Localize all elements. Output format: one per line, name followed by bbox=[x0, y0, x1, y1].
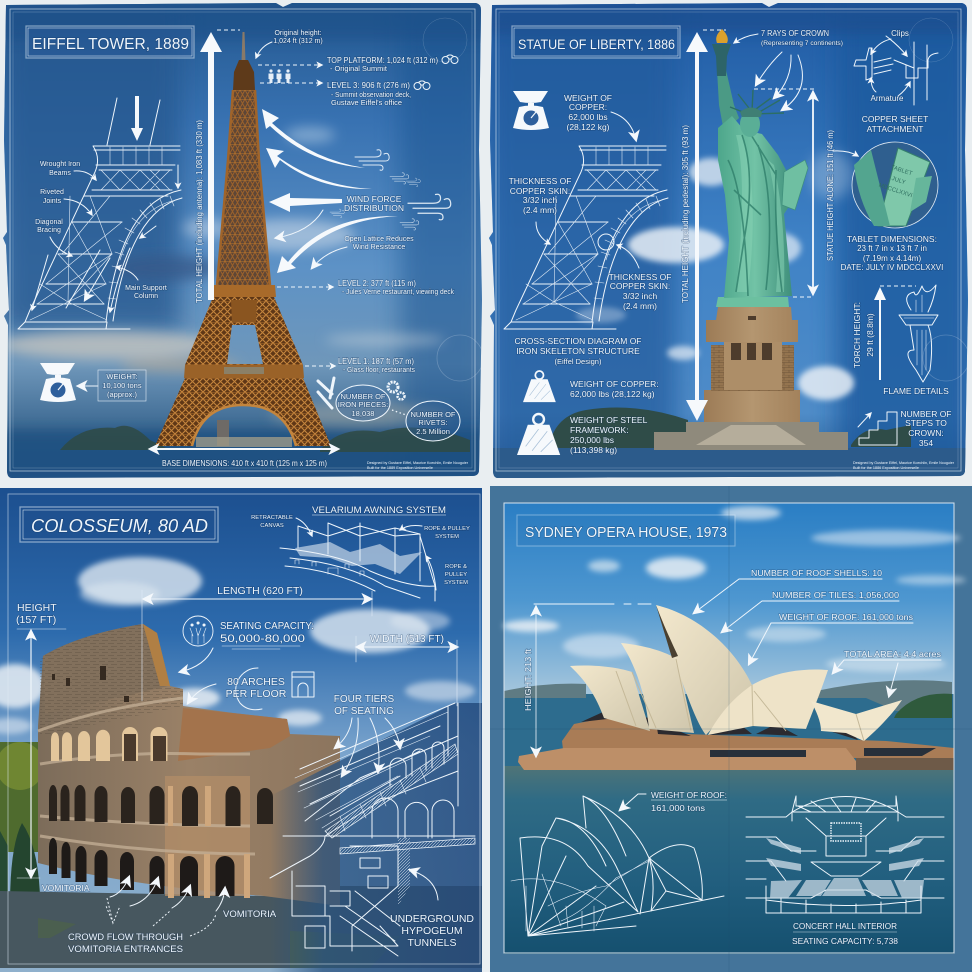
four tiers label: OF SEATING bbox=[334, 706, 394, 717]
right quay bbox=[856, 758, 954, 770]
thickness note left: (2.4 mm) bbox=[523, 205, 557, 215]
hypogeum label: UNDERGROUND bbox=[390, 913, 474, 925]
sky background bbox=[486, 0, 972, 486]
crown rays bbox=[730, 90, 784, 114]
hypogeum label: TUNNELS bbox=[407, 937, 457, 949]
plinth bbox=[716, 297, 789, 307]
clouds bbox=[503, 506, 966, 672]
glass band bbox=[710, 748, 936, 757]
label: riveted joints: Joints bbox=[43, 198, 62, 205]
inner frame and stamps bbox=[496, 9, 969, 471]
lattice note bbox=[344, 236, 414, 251]
weight box: 10,100 tons bbox=[102, 381, 142, 390]
panel: Colosseum bbox=[0, 488, 482, 972]
statue height label: STATUE HEIGHT ALONE: 151 ft (46 m) bbox=[825, 130, 835, 261]
trees bbox=[549, 408, 911, 450]
four tiers label: FOUR TIERS bbox=[334, 694, 395, 705]
iron structure diagram bbox=[18, 96, 182, 329]
panel: Eiffel Tower bbox=[0, 0, 490, 486]
height dimension: (157 FT) bbox=[16, 614, 56, 626]
level 2 callout bbox=[277, 279, 454, 296]
seating capacity: 50,000-80,000 bbox=[220, 633, 305, 645]
top platform callout: TOP PLATFORM: 1,024 ft (312 m) bbox=[327, 56, 438, 65]
pedestal centre bbox=[724, 340, 782, 390]
rivets oval: NUMBER OF bbox=[410, 410, 456, 419]
rivets oval: RIVETS: bbox=[418, 418, 448, 427]
retractable canvas note bbox=[251, 515, 312, 536]
harbour water bbox=[504, 694, 954, 769]
vomitoria right label: VOMITORIA bbox=[223, 909, 277, 920]
bolts and gears icons bbox=[318, 378, 404, 408]
roof weight callout: WEIGHT OF ROOF: 161,000 tons bbox=[779, 612, 913, 622]
label: wrought iron beams: Wrought Iron bbox=[40, 161, 80, 168]
statue height arrow bbox=[754, 89, 814, 297]
credit: Designed by Gustave Eiffel, Maurice Koechlin, Emile Nouguier bbox=[367, 461, 469, 465]
blueprint vignette bbox=[0, 0, 490, 480]
roof geometry sketch bbox=[511, 796, 724, 936]
original height note: Original height: bbox=[274, 30, 322, 37]
crown band bbox=[740, 108, 762, 117]
label: wrought iron beams bbox=[40, 161, 96, 180]
label: diagonal bracing bbox=[35, 219, 72, 256]
credit: Built for the 1889 Exposition Universelle bbox=[367, 466, 433, 470]
bottom tier arches bbox=[49, 838, 234, 896]
credit bbox=[367, 461, 469, 470]
length dimension: LENGTH (620 FT) bbox=[217, 585, 303, 597]
star fort bbox=[696, 425, 806, 445]
icon: steel weight bbox=[517, 414, 560, 455]
outer wall bbox=[38, 624, 340, 906]
copper attachment sketch bbox=[854, 36, 938, 105]
colosseum photo bbox=[38, 624, 340, 906]
thickness note right: COPPER SKIN: bbox=[610, 281, 670, 291]
tablet detail circle: TABLET bbox=[890, 165, 913, 177]
steel weight: 250,000 lbs bbox=[570, 435, 614, 445]
cross brace bbox=[231, 300, 257, 322]
rope note one bbox=[400, 526, 470, 540]
tablet bbox=[782, 160, 808, 210]
tablet dimensions: 23 ft 7 in x 13 ft 7 in bbox=[857, 244, 927, 253]
tablet detail circle: JULY bbox=[891, 176, 906, 186]
icon: scale bbox=[40, 363, 76, 402]
level 1 callout: - Glass floor, restaurants bbox=[343, 367, 415, 374]
top platform callout: - Original Summit bbox=[330, 66, 387, 73]
wind arrows bbox=[262, 109, 398, 273]
rope note two bbox=[426, 556, 468, 590]
level 1 callout: LEVEL 1: 187 ft (57 m) bbox=[338, 357, 414, 366]
velarium heading: VELARIUM AWNING SYSTEM bbox=[312, 505, 446, 516]
dotted connector bbox=[392, 410, 406, 415]
cornices bbox=[38, 698, 255, 854]
credit bbox=[853, 461, 955, 470]
height dimension: HEIGHT bbox=[17, 602, 57, 614]
title box: EIFFEL TOWER, 1889 bbox=[32, 36, 189, 53]
rope note two: ROPE & bbox=[445, 564, 467, 570]
original height note bbox=[256, 30, 323, 58]
label: main support column bbox=[116, 267, 167, 300]
label: main support column: Main Support bbox=[125, 285, 167, 292]
retractable canvas note: CANVAS bbox=[260, 523, 284, 529]
armature label: Armature bbox=[871, 94, 904, 103]
vomitoria left label: VOMITORIA bbox=[42, 883, 90, 893]
iron pieces oval: NUMBER OF bbox=[340, 392, 386, 401]
copper weight: 62,000 lbs (28,122 kg) bbox=[570, 389, 655, 399]
tablet arrow bbox=[833, 151, 858, 156]
flame bbox=[716, 29, 728, 43]
cross-section caption bbox=[514, 336, 642, 366]
shadow slope bbox=[143, 624, 170, 686]
cross-section caption: (Eiffel Design) bbox=[555, 357, 602, 366]
wind force label: DISTRIBUTION bbox=[344, 203, 404, 213]
crowd flow label: CROWD FLOW THROUGH bbox=[68, 932, 183, 943]
rope note two: PULLEY bbox=[445, 572, 467, 578]
label: main support column: Column bbox=[134, 293, 158, 300]
total height arrow bbox=[686, 30, 726, 421]
tunnel wall hatching bbox=[398, 838, 410, 906]
shell 1 dark edge bbox=[656, 605, 678, 658]
headland bbox=[894, 694, 952, 718]
roof weight callout bbox=[749, 612, 913, 664]
wind force label: WIND FORCE bbox=[347, 194, 402, 204]
tablet detail circle: MDCCLXXVI bbox=[878, 183, 913, 199]
glass wedges under shells bbox=[581, 712, 858, 740]
steps to crown: 354 bbox=[919, 438, 933, 448]
rope note two: SYSTEM bbox=[444, 580, 468, 586]
upper shaft bbox=[217, 90, 270, 285]
middle legs bbox=[185, 297, 303, 365]
deck windows bbox=[224, 367, 264, 374]
level 1 callout bbox=[305, 357, 415, 374]
sky bbox=[504, 503, 954, 698]
rope note one: SYSTEM bbox=[435, 534, 459, 540]
level 3 callout bbox=[260, 81, 430, 107]
rivets oval: 2.5 Million bbox=[416, 427, 450, 436]
crown rays callout: (Representing 7 continents) bbox=[761, 40, 843, 47]
thickness note right bbox=[609, 245, 671, 311]
thickness note left bbox=[509, 176, 571, 244]
torch height arrow bbox=[874, 286, 916, 380]
top tier arches bbox=[51, 727, 168, 761]
thickness note right: THICKNESS OF bbox=[609, 272, 671, 282]
base dimension arrow bbox=[150, 448, 338, 450]
windows bbox=[731, 316, 772, 360]
weight box: WEIGHT: bbox=[106, 372, 138, 381]
shaft edges bbox=[217, 90, 270, 285]
robe bbox=[718, 116, 792, 298]
steel weight: FRAMEWORK: bbox=[570, 425, 629, 435]
base steps bbox=[654, 422, 848, 450]
steel weight: WEIGHT OF STEEL bbox=[570, 415, 648, 425]
podium wall bbox=[562, 718, 954, 758]
lit piers bbox=[168, 786, 250, 898]
height dimension bbox=[16, 602, 66, 878]
thickness note left: 3/32 inch bbox=[523, 195, 558, 205]
level 3 callout: LEVEL 3: 906 ft (276 m) bbox=[327, 81, 410, 90]
total height label: TOTAL HEIGHT (including antenna): 1,083 ft (330 m) bbox=[194, 120, 204, 303]
label: diagonal bracing: Bracing bbox=[37, 227, 61, 234]
water bbox=[486, 448, 972, 478]
thickness note right: 3/32 inch bbox=[623, 291, 658, 301]
total height arrow bbox=[200, 30, 240, 300]
height dimension bbox=[534, 604, 651, 756]
level 2 deck bbox=[211, 285, 276, 297]
credit: Built for the 1886 Exposition Universelle bbox=[853, 466, 919, 470]
torch height label bbox=[852, 302, 875, 368]
steps to crown bbox=[900, 409, 952, 448]
head bbox=[740, 111, 760, 137]
cross-section caption: CROSS-SECTION DIAGRAM OF bbox=[514, 336, 642, 346]
lattice note: Open Lattice Reduces bbox=[344, 236, 414, 243]
icon: scale bbox=[513, 91, 549, 130]
crowd flow label: VOMITORIA ENTRANCES bbox=[68, 944, 183, 955]
tablet dimensions bbox=[841, 234, 943, 272]
lattice note: Wind Resistance bbox=[353, 244, 405, 251]
flame details label: FLAME DETAILS bbox=[883, 386, 949, 396]
copper weight note: COPPER: bbox=[569, 102, 607, 112]
arches per floor: 80 ARCHES bbox=[227, 676, 285, 688]
top platform callout bbox=[258, 55, 458, 73]
width dimension bbox=[356, 634, 457, 706]
crowd flow arrows bbox=[106, 877, 225, 936]
steps to crown: NUMBER OF bbox=[900, 409, 952, 419]
thickness note left: THICKNESS OF bbox=[509, 176, 571, 186]
weight box bbox=[98, 370, 146, 401]
shell 3 bbox=[570, 665, 650, 731]
title box bbox=[26, 26, 194, 58]
frame bbox=[504, 503, 954, 953]
torch height label: 29 ft (8.8m) bbox=[865, 313, 875, 357]
title box bbox=[512, 26, 680, 58]
cornice bbox=[706, 307, 798, 342]
iron pieces oval: IRON PIECES: bbox=[338, 400, 388, 409]
iron skeleton diagram bbox=[504, 146, 668, 329]
title box: SYDNEY OPERA HOUSE, 1973 bbox=[525, 524, 727, 541]
hypogeum blueprint cutaway bbox=[270, 703, 482, 972]
iron pieces oval bbox=[336, 385, 390, 421]
icon: copper weight bbox=[523, 371, 556, 402]
clouds bbox=[0, 557, 475, 734]
tablet dimensions: TABLET DIMENSIONS: bbox=[847, 234, 937, 244]
distant trees bbox=[60, 426, 470, 452]
copper sheet label bbox=[862, 114, 928, 134]
lower legs and arch bbox=[155, 378, 331, 446]
sky background bbox=[0, 488, 482, 972]
steel weight bbox=[570, 415, 648, 455]
panel: Statue of Liberty bbox=[486, 0, 972, 486]
roof weight note: WEIGHT OF ROOF: bbox=[651, 790, 727, 800]
length dimension bbox=[142, 585, 372, 701]
label: diagonal bracing: Diagonal bbox=[35, 219, 63, 226]
label: riveted joints bbox=[40, 189, 92, 215]
level 2 callout: - Jules Verne restaurant, viewing deck bbox=[342, 289, 454, 296]
attic stone texture bbox=[40, 624, 183, 736]
seating capacity bbox=[180, 620, 314, 672]
panel: Sydney Opera House bbox=[490, 486, 972, 972]
crowd flow label bbox=[68, 932, 183, 955]
sea bbox=[504, 766, 954, 954]
weight box: (approx.) bbox=[107, 390, 138, 399]
arch rim bbox=[192, 405, 296, 446]
copper weight note: 62,000 lbs bbox=[568, 112, 608, 122]
eiffel tower photo bbox=[155, 32, 331, 447]
fold lines bbox=[490, 486, 972, 972]
retractable canvas note: RETRACTABLE bbox=[251, 515, 293, 521]
hatched slabs bbox=[325, 744, 475, 854]
concert hall caption bbox=[792, 921, 898, 946]
inner frame and stamps bbox=[10, 9, 483, 471]
title box bbox=[20, 507, 218, 542]
copper sheet label: ATTACHMENT bbox=[867, 124, 923, 134]
tablet dimensions: DATE: JULY IV MDCCLXXVI bbox=[841, 263, 943, 272]
copper weight: WEIGHT OF COPPER: bbox=[570, 379, 659, 389]
drapery highlights bbox=[736, 135, 784, 292]
opera house photo bbox=[518, 605, 954, 770]
title box bbox=[517, 515, 735, 546]
raised arm bbox=[717, 70, 739, 132]
wind icons bbox=[330, 150, 451, 230]
label: riveted joints: Riveted bbox=[40, 189, 64, 196]
chambers bbox=[292, 846, 398, 951]
sky background bbox=[0, 0, 486, 486]
copper weight note bbox=[564, 93, 636, 140]
base dimensions label: BASE DIMENSIONS: 410 ft x 410 ft (125 m x 125 m) bbox=[162, 459, 327, 468]
top tier shade bbox=[124, 734, 166, 761]
tunnels bbox=[340, 891, 400, 956]
lawn bbox=[38, 918, 400, 968]
crown rays callout bbox=[734, 29, 843, 110]
label: wrought iron beams: Beams bbox=[49, 170, 71, 177]
thickness note right: (2.4 mm) bbox=[623, 301, 657, 311]
arches per floor bbox=[188, 668, 287, 710]
height label: HEIGHT: 213 ft bbox=[523, 648, 533, 711]
upper attic shading bbox=[43, 624, 168, 714]
copper weight note: WEIGHT OF bbox=[564, 93, 612, 103]
rope note one: ROPE & PULLEY bbox=[424, 526, 470, 532]
roof weight note bbox=[620, 790, 727, 813]
pedestal lower bbox=[704, 390, 800, 422]
concert hall caption: CONCERT HALL INTERIOR bbox=[793, 921, 897, 931]
floor bbox=[270, 836, 475, 878]
steel weight: (113,398 kg) bbox=[570, 445, 617, 455]
drapery bbox=[728, 130, 782, 296]
iron pieces oval: 18,038 bbox=[352, 409, 374, 418]
lower plinth bbox=[518, 748, 856, 770]
original height note: 1,024 ft (312 m) bbox=[273, 38, 323, 45]
title box: STATUE OF LIBERTY, 1886 bbox=[518, 36, 675, 52]
level 2 callout: LEVEL 2: 377 ft (115 m) bbox=[338, 279, 416, 288]
concert hall caption: SEATING CAPACITY: 5,738 bbox=[792, 936, 898, 946]
shell ribs bbox=[616, 659, 864, 741]
clouds bbox=[0, 127, 450, 427]
frame bbox=[8, 494, 480, 964]
ruin wall back bbox=[178, 708, 290, 761]
pedestal shaft bbox=[711, 345, 794, 391]
weight arrow bbox=[78, 385, 98, 387]
copper weight note: (28,122 kg) bbox=[566, 122, 610, 132]
seat rows bbox=[295, 712, 448, 831]
shell 5 bbox=[811, 700, 902, 741]
crown rays callout: 7 RAYS OF CROWN bbox=[761, 29, 829, 38]
arches per floor: PER FLOOR bbox=[226, 688, 287, 700]
attic windows bbox=[52, 666, 129, 702]
clouds bbox=[576, 151, 854, 400]
roof shells callout: NUMBER OF ROOF SHELLS: 10 bbox=[751, 568, 882, 578]
four tiers label bbox=[334, 694, 400, 776]
width dimension: WIDTH (513 FT) bbox=[370, 634, 444, 645]
view through arch bbox=[217, 420, 229, 446]
distant shore bbox=[504, 680, 952, 711]
title box: COLOSSEUM, 80 AD bbox=[31, 516, 208, 536]
total area callout: TOTAL AREA: 4.4 acres bbox=[844, 649, 941, 659]
hypogeum label bbox=[390, 870, 474, 949]
total height label: TOTAL HEIGHT (including pedestal): 305 ft (93 m) bbox=[680, 125, 690, 303]
tiles callout: NUMBER OF TILES: 1,056,000 bbox=[772, 590, 899, 600]
roof shells callout bbox=[694, 568, 882, 613]
blueprint vignette bbox=[486, 0, 972, 486]
hypogeum label: HYPOGEUM bbox=[401, 925, 463, 937]
antenna bbox=[242, 32, 246, 62]
shell 2 bbox=[621, 643, 694, 733]
copper weight bbox=[570, 379, 659, 399]
plaza ground bbox=[0, 886, 482, 968]
torch height label: TORCH HEIGHT: bbox=[852, 302, 862, 368]
rivets oval bbox=[406, 401, 460, 441]
outer paper margin bbox=[490, 486, 972, 972]
people icons bbox=[268, 69, 290, 83]
roof weight note: 161,000 tons bbox=[651, 803, 705, 813]
tablet dimensions: (7.19m x 4.14m) bbox=[863, 254, 921, 263]
level 3 callout: Gustave Eiffel's office bbox=[331, 100, 402, 107]
wind force label bbox=[344, 195, 404, 212]
thickness note left: COPPER SKIN: bbox=[510, 186, 570, 196]
icon: seating crowd bbox=[183, 616, 213, 646]
tiles callout bbox=[722, 590, 899, 632]
icon: triumphal arch bbox=[292, 672, 314, 697]
level 3 callout: - Summit observation deck, bbox=[331, 92, 411, 99]
steps to crown: STEPS TO bbox=[905, 418, 947, 428]
concert hall sketch bbox=[746, 796, 944, 913]
steps to crown: CROWN: bbox=[908, 428, 944, 438]
copper sheet label: COPPER SHEET bbox=[862, 114, 928, 124]
seating capacity: SEATING CAPACITY: bbox=[220, 620, 314, 632]
summit bbox=[233, 60, 255, 90]
clips label: Clips bbox=[891, 29, 909, 38]
level 1 deck bbox=[184, 365, 304, 378]
trees left bbox=[0, 742, 44, 938]
tablet detail circle bbox=[852, 142, 938, 228]
total area callout bbox=[833, 649, 941, 696]
statue and pedestal photo bbox=[654, 29, 848, 450]
credit: Designed by Gustave Eiffel, Maurice Koechlin, Emile Nouguier bbox=[853, 461, 955, 465]
torch bbox=[712, 44, 731, 76]
shell 4 bbox=[708, 669, 828, 735]
cross-section caption: IRON SKELETON STRUCTURE bbox=[516, 346, 640, 356]
velarium sketch bbox=[280, 523, 435, 601]
shell 1 bbox=[656, 605, 752, 735]
seating tiers bbox=[300, 703, 458, 836]
sunlit piers bbox=[165, 776, 250, 896]
flame sketch bbox=[899, 285, 938, 382]
arcade bbox=[372, 742, 454, 838]
icon: steps bbox=[858, 412, 897, 445]
middle tier arches bbox=[49, 785, 273, 826]
